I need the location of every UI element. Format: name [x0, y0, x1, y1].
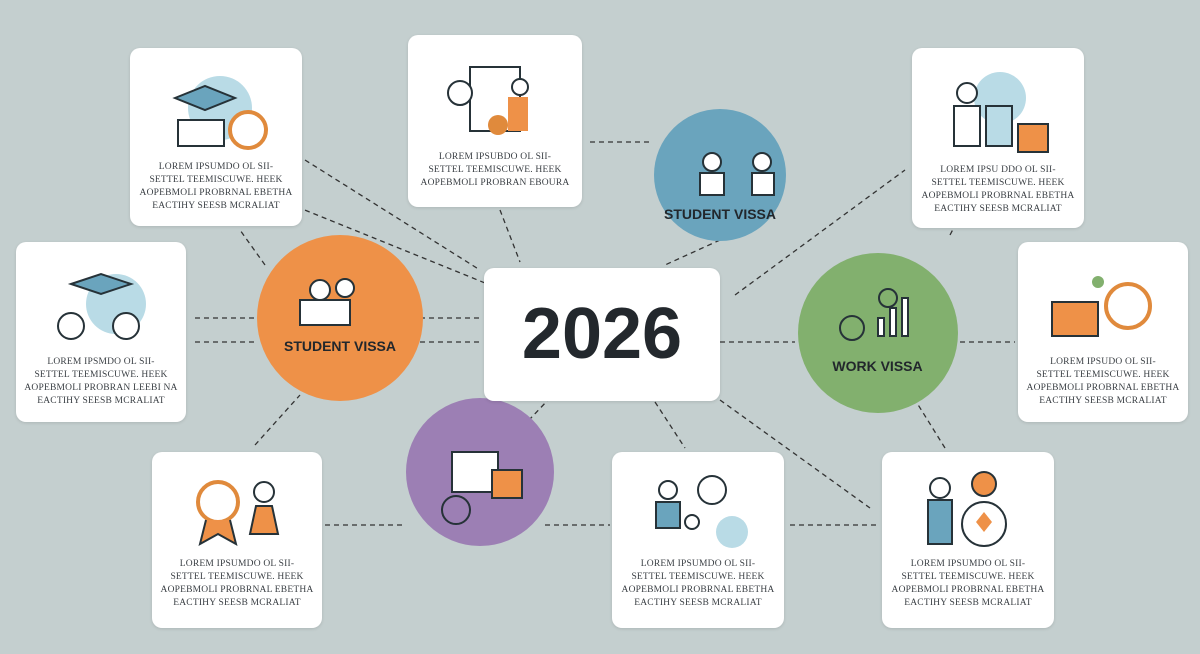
- card top-right: [912, 48, 1084, 228]
- card bottom-center: SETTEL TEEMISCUWE. HEEK: [631, 572, 765, 582]
- card mid-right: [1018, 242, 1188, 422]
- card mid-left: SETTEL TEEMISCUWE. HEEK: [34, 370, 168, 380]
- blob: green: [798, 253, 958, 413]
- card bottom-left: LOREM IPSUMDO OL SII-: [180, 559, 294, 569]
- card top-right: SETTEL TEEMISCUWE. HEEK: [931, 178, 1065, 188]
- blob: purple: [406, 398, 554, 546]
- card top-right: EACTIHY SEESB MCRALIAT: [934, 204, 1062, 214]
- blob: student orange: [257, 235, 423, 401]
- card top-center: [408, 35, 582, 207]
- card bottom-left: SETTEL TEEMISCUWE. HEEK: [170, 572, 304, 582]
- card mid-right: LOREM IPSUDO OL SII-: [1050, 357, 1156, 367]
- label: student vissa: STUDENT VISSA: [284, 338, 396, 354]
- card mid-left: LOREM IPSMDO OL SII-: [47, 357, 155, 367]
- card bottom-left: EACTIHY SEESB MCRALIAT: [173, 598, 301, 608]
- card top-right: LOREM IPSU DDO OL SII-: [940, 165, 1056, 175]
- card bottom-center: AOPEBMOLI PROBRNAL EBETHA: [622, 585, 774, 595]
- card top-center: AOPEBMOLI PROBRAN EBOURA: [421, 178, 569, 188]
- card mid-left: [16, 242, 186, 422]
- card mid-left: EACTIHY SEESB MCRALIAT: [37, 396, 165, 406]
- card top-left: SETTEL TEEMISCUWE. HEEK: [149, 175, 283, 185]
- card bottom-right: LOREM IPSUMDO OL SII-: [911, 559, 1025, 569]
- card bottom-right: [882, 452, 1054, 628]
- card mid-right: AOPEBMOLI PROBRNAL EBETHA: [1027, 383, 1179, 393]
- card bottom-right: AOPEBMOLI PROBRNAL EBETHA: [892, 585, 1044, 595]
- card bottom-right: SETTEL TEEMISCUWE. HEEK: [901, 572, 1035, 582]
- card bottom-left: AOPEBMOLI PROBRNAL EBETHA: [161, 585, 313, 595]
- card top-left: EACTIHY SEESB MCRALIAT: [152, 201, 280, 211]
- label: work vissa: WORK VISSA: [832, 358, 923, 374]
- card bottom-right: EACTIHY SEESB MCRALIAT: [904, 598, 1032, 608]
- card top-left: LOREM IPSUMDO OL SII-: [159, 162, 273, 172]
- card bottom-center: LOREM IPSUMDO OL SII-: [641, 559, 755, 569]
- card top-left: [130, 48, 302, 226]
- card top-center: SETTEL TEEMISCUWE. HEEK: [428, 165, 562, 175]
- blob: blue: [654, 109, 786, 241]
- center box 2026: [484, 268, 720, 401]
- center box 2026: 2026: [522, 294, 682, 374]
- card top-left: AOPEBMOLI PROBRNAL EBETHA: [140, 188, 292, 198]
- card bottom-left: [152, 452, 322, 628]
- card bottom-center: EACTIHY SEESB MCRALIAT: [634, 598, 762, 608]
- card mid-left: AOPEBMOLI PROBRAN LEEBI NA: [24, 383, 178, 393]
- card top-center: LOREM IPSUBDO OL SII-: [439, 152, 551, 162]
- card bottom-center: [612, 452, 784, 628]
- card top-right: AOPEBMOLI PROBRNAL EBETHA: [922, 191, 1074, 201]
- card mid-right: EACTIHY SEESB MCRALIAT: [1039, 396, 1167, 406]
- label: student vissa blue: STUDENT VISSA: [664, 206, 776, 222]
- card mid-right: SETTEL TEEMISCUWE. HEEK: [1036, 370, 1170, 380]
